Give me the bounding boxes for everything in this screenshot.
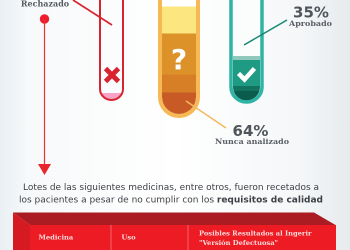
intro text: Lotes de las siguientes medicinas, entre otros, fueron recetados a bbox=[23, 183, 319, 193]
test tube: never analysed bbox=[160, 0, 198, 118]
header: Medicina: Medicina bbox=[38, 234, 74, 242]
header: Posibles Resultados: "Versión Defectuosa" bbox=[199, 239, 278, 247]
intro text bbox=[19, 183, 323, 206]
header: Posibles Resultados: Posibles Resultados al Ingerir bbox=[199, 230, 312, 238]
icon: check mark bbox=[238, 68, 254, 80]
table header bbox=[13, 212, 336, 250]
rejected pointer line bbox=[73, 0, 112, 25]
test tube: rejected bbox=[73, 0, 123, 100]
icon: red cross bbox=[106, 68, 118, 82]
test tube: approved bbox=[230, 0, 263, 103]
header: Posibles Resultados bbox=[199, 230, 312, 247]
red arrow down bbox=[38, 14, 51, 175]
label: 35% Aprobado: Aprobado bbox=[288, 19, 332, 28]
label: 64% Nunca analizado: 64% bbox=[233, 122, 268, 140]
approved pointer line bbox=[244, 20, 287, 45]
never analysed pointer line bbox=[186, 101, 226, 128]
intro text: los pacientes a pesar de no cumplir con los requisitos de calidad bbox=[19, 196, 323, 206]
label: 35% Aprobado: 35% bbox=[293, 4, 329, 22]
label: 64% Nunca analizado: Nunca analizado bbox=[215, 137, 289, 146]
label: 35% Aprobado bbox=[288, 4, 332, 28]
icon: question mark: ? bbox=[171, 43, 187, 76]
header: Uso: Uso bbox=[122, 234, 136, 242]
label: 64% Nunca analizado bbox=[215, 122, 289, 146]
